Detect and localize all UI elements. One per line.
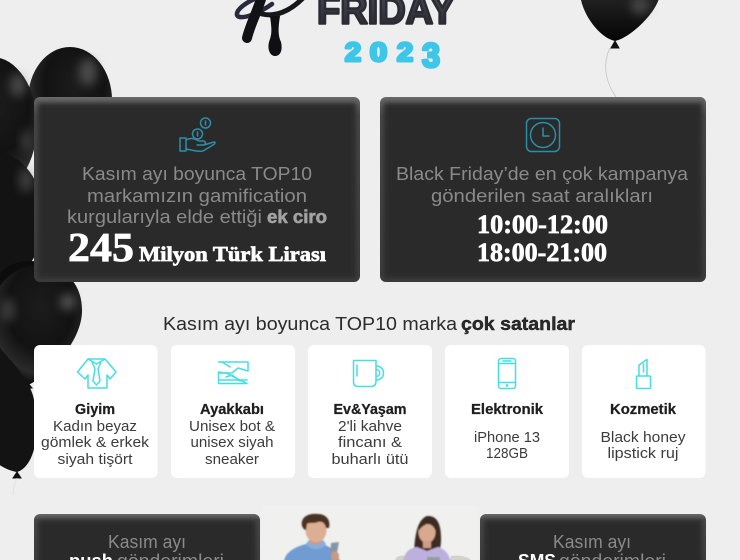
card: Kozmetik <box>582 345 706 478</box>
text: Kozmetik: Kozmetik <box>610 402 677 418</box>
text: saat description: gönderilen saat aralıkları <box>431 185 653 206</box>
icon: shirt <box>78 359 116 388</box>
person: woman <box>403 516 451 560</box>
text: ek ciro description: ek ciro <box>267 206 327 227</box>
balloon small lower <box>0 261 64 309</box>
text: SMS <box>518 531 666 560</box>
text: Ayakkabı: unisex siyah <box>190 434 274 451</box>
times: 10:00-12:00 <box>477 210 608 239</box>
text: Ev&Yaşam: buharlı ütü <box>332 451 408 468</box>
card: Giyim <box>34 345 158 478</box>
figure: 245 Milyon Türk Lirası <box>68 224 326 270</box>
text: Giyim: Giyim <box>75 402 115 418</box>
icon: mug <box>354 360 384 386</box>
times <box>477 210 608 267</box>
text: saat description <box>396 163 689 206</box>
logo: 2023: 2 <box>345 37 361 67</box>
text: Ayakkabı <box>189 402 275 468</box>
text: Giyim <box>41 402 150 468</box>
text: Giyim: siyah tişört <box>58 451 133 468</box>
balloon middle left <box>0 152 44 284</box>
logo: 2023: 3 <box>422 37 440 75</box>
figure: 245 Milyon Türk Lirası: 245 <box>68 224 134 270</box>
panel: SMS gönderimleri <box>480 514 706 560</box>
logo: script mark <box>237 0 305 56</box>
balloon lower <box>0 265 82 388</box>
balloon bottom <box>0 330 37 495</box>
text: SMS: Kasım ayı <box>553 531 631 552</box>
text: push <box>69 531 224 560</box>
heading: çok satanlar <box>163 313 575 334</box>
text: ek ciro description: kurgularıyla elde ettiği <box>67 206 262 227</box>
text: Giyim: gömlek & erkek <box>41 434 150 451</box>
icon: clock <box>526 118 560 152</box>
balloon top right of cluster <box>28 47 112 153</box>
icon: shoes <box>218 362 248 384</box>
text: Kozmetik: Black honey <box>600 429 686 446</box>
text: ek ciro description <box>67 163 327 227</box>
text: Ayakkabı: Unisex bot & <box>189 418 275 435</box>
photo: people with phones <box>262 505 478 560</box>
heading: çok satanlar: Kasım ayı boyunca TOP10 marka <box>163 313 458 334</box>
panel: saat aralıkları <box>380 97 706 282</box>
heading: çok satanlar: çok satanlar <box>461 313 575 334</box>
text: Elektronik: 128GB <box>486 445 528 462</box>
person: man <box>284 514 340 560</box>
text: Giyim: Kadın beyaz <box>53 418 137 435</box>
balloon upper left <box>0 57 37 193</box>
text: Ev&Yaşam <box>332 402 408 468</box>
text: ek ciro description: markamızın gamification <box>87 185 307 206</box>
text: Ev&Yaşam: 2'li kahve <box>338 418 402 435</box>
card: Ayakkabı <box>171 345 295 478</box>
text: Kozmetik: lipstick ruj <box>608 445 678 462</box>
text: ek ciro description: Kasım ayı boyunca TOP10 <box>82 163 312 184</box>
sofa <box>395 556 472 560</box>
text: Ev&Yaşam: fincanı & <box>338 434 402 451</box>
card: Elektronik <box>445 345 569 478</box>
panel: push gönderimleri <box>34 514 260 560</box>
card: Ev&Yaşam <box>308 345 432 478</box>
text: Ayakkabı: sneaker <box>205 451 259 468</box>
logo: 2023: 2 <box>397 37 413 67</box>
times: 18:00-21:00 <box>477 238 607 267</box>
icon: phone <box>498 358 516 388</box>
balloon top right <box>580 0 660 97</box>
icon: lipstick <box>636 360 650 388</box>
text: Ev&Yaşam: Ev&Yaşam <box>334 402 406 418</box>
text: Elektronik: Elektronik <box>471 402 544 418</box>
text: Kozmetik <box>600 402 686 462</box>
figure: 245 Milyon Türk Lirası: Milyon Türk Lirası <box>139 242 326 266</box>
logo: 2023: 0 <box>370 37 387 67</box>
text: saat description: Black Friday’de en çok kampanya <box>396 163 689 184</box>
text: Elektronik: iPhone 13 <box>474 429 540 446</box>
icon: coins and hand <box>180 118 215 151</box>
panel: ek ciro <box>34 97 360 282</box>
text: Elektronik <box>471 402 544 462</box>
logo: 2023 <box>345 37 440 75</box>
text: Ayakkabı: Ayakkabı <box>200 402 264 418</box>
balloons left cluster <box>0 47 112 495</box>
text: push: Kasım ayı <box>108 531 186 552</box>
